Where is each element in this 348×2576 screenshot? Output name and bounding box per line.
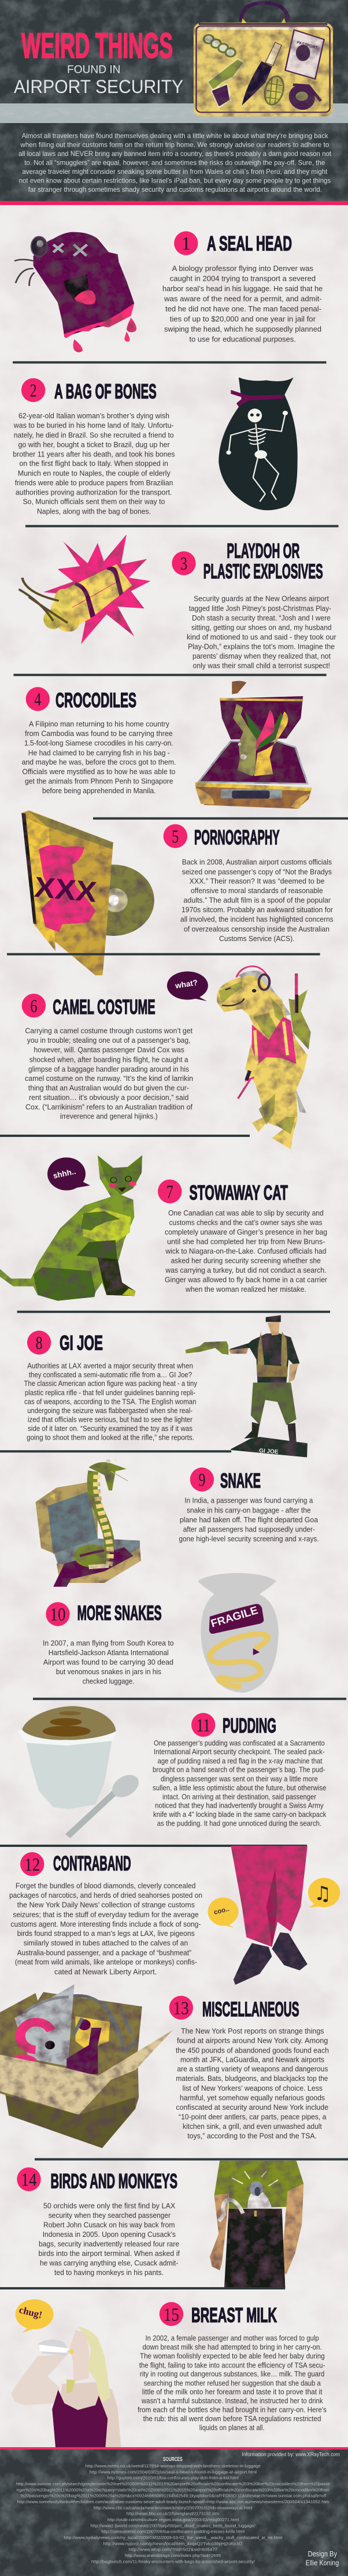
text block: cas of weapons, according to the TSA. The English woman bbox=[24, 1397, 196, 1406]
text block: Back in 2008, Australian airport customs officials bbox=[182, 858, 332, 867]
text block bbox=[24, 1361, 197, 1442]
text block: he was carrying anything else, Cusack admit- bbox=[40, 2259, 178, 2268]
text block: He had claimed to be carrying fish in his bag - bbox=[28, 748, 170, 757]
icon: cat bbox=[0, 1155, 142, 1301]
text block bbox=[13, 411, 175, 515]
text block: 62-year-old Italian woman’s brother’s dying wish bbox=[18, 411, 169, 420]
speech bubble: shhh bbox=[47, 1158, 90, 1190]
speech bubble: what: what? bbox=[174, 978, 198, 990]
text block: birds found strapped to a man’s legs at LAX, live pigeons bbox=[17, 1929, 195, 1938]
text block: bags, security inadvertently released four rare bbox=[39, 2240, 179, 2248]
text block: undergoing the seizure was flabbergasted when she real- bbox=[27, 1406, 192, 1415]
sources list: http://www.somebodythinkofthechildren.com/australian-customs-seize-adult-brady-bunch-spoof/+http://www.abc.net.au/news/newsitems/200504/s1341052.htm bbox=[17, 2499, 329, 2504]
heading: CAMEL COSTUME bbox=[53, 996, 156, 1018]
text block: Security guards at the New Orleans airport bbox=[194, 594, 329, 603]
number 4 bbox=[26, 687, 50, 711]
text block: rent situation… it’s obviously a poor decision,” said bbox=[29, 1093, 188, 1102]
text block: irreverence and general hijinks.) bbox=[60, 1112, 158, 1121]
text block: 1970s sitcom. Probably an awkward situation for bbox=[182, 905, 334, 914]
text block bbox=[22, 719, 176, 795]
text block: sitting, getting our shoes on and, my husband bbox=[191, 623, 332, 632]
text block: harmful, yet somehow equally nefarious goods bbox=[180, 2094, 325, 2102]
fragile label: FRAGILE bbox=[209, 1604, 260, 1630]
text block: similarly stowed in tubes attached to the calves of an bbox=[24, 1939, 188, 1947]
text block: searching the mother refused her suggestion that she daub a bbox=[144, 2378, 321, 2387]
sources list: http://www2.ljworld.com/news/2007/sep/09/jars_dead_snakes_birds_found_luggage/ bbox=[91, 2523, 256, 2528]
panel: 14 birds and monkeys bbox=[17, 2161, 303, 2289]
sources list: http://bagbunch.com/11-freaky-encounters-with-bags-by-astonished-airport-security/ bbox=[91, 2559, 256, 2564]
intro text: to. Not all “smugglers” are equal, however, and sometimes the risks do outweigh the pay-off. Sure, the bbox=[24, 159, 325, 167]
text block: Officials were mystified as to how he was able to bbox=[22, 767, 175, 776]
sources list: http://www.nytimes.com/2004/03/21/us/seal-s-head-s-found-in-luggage-at-airport.html bbox=[90, 2469, 257, 2474]
panel: 10 more snakes bbox=[43, 1573, 279, 1693]
sources list: http://news.bbc.co.uk/2/hi/england/2173150.stm bbox=[127, 2511, 219, 2516]
text block bbox=[153, 1739, 327, 1828]
text block: customs checks and the cat’s owner says she was bbox=[169, 1218, 323, 1227]
text block: from Cambodia was found to be carrying three bbox=[25, 729, 173, 738]
sources heading: SOURCES bbox=[163, 2456, 183, 2463]
number 1 bbox=[174, 231, 198, 255]
text block: was to be buried in his home land of Italy. Unfortu- bbox=[13, 421, 174, 430]
icon: fragile bag of snakes bbox=[198, 1573, 279, 1693]
text block: packages of narcotics, and herds of dried seahorses posted on bbox=[9, 1891, 202, 1900]
text block: Airport was found to be carrying 30 dead bbox=[43, 1657, 173, 1666]
icon: woman drinking milk bbox=[11, 2327, 121, 2447]
text block: toys,” according to the Post and the TSA. bbox=[187, 2132, 317, 2140]
intro text: all local laws and NEVER bring any banned item into a country, as there’s probably a darn good reason not bbox=[18, 150, 332, 158]
number 5: 5 bbox=[172, 826, 179, 847]
text block: seized one passenger’s copy of “Not the Bradys bbox=[182, 867, 332, 876]
sources list: http://guyism.com/2010/01/tsa-confiscates-play-doh-from-a-kid.html bbox=[107, 2475, 239, 2481]
sources list: http://www.anecdotage.com/index.php?aid=2695 bbox=[125, 2553, 221, 2558]
text block: Cox. (“Larrikinism” refers to an Australian tradition of bbox=[25, 1102, 192, 1111]
panel: 11 pudding bbox=[17, 1706, 327, 1836]
number 15 bbox=[160, 2302, 183, 2326]
panel: 5 pornography bbox=[21, 811, 334, 975]
text block: are a startling variety of weapons and dangerous bbox=[177, 2065, 328, 2073]
text block: checked luggage. bbox=[83, 1677, 134, 1685]
number 15: 15 bbox=[164, 2304, 179, 2325]
text block bbox=[25, 1026, 193, 1121]
text block: Robert John Cusack on his way back from bbox=[43, 2220, 175, 2229]
sources list bbox=[16, 2463, 330, 2564]
text block: brother 11 years after his death, and took his bones bbox=[13, 450, 175, 459]
number 7: 7 bbox=[166, 1181, 173, 1202]
text block bbox=[187, 594, 336, 670]
text block: caught in 2004 trying to transport a severed bbox=[170, 274, 316, 283]
text block: little of the milk onto her forearm and taste it to prove that it bbox=[142, 2388, 323, 2396]
text block: seizures; that is the stuff of everyday tedium for the average bbox=[13, 1910, 199, 1919]
number 7 bbox=[158, 1180, 182, 1203]
text block: ted he did not have one. The man faced penal- bbox=[165, 304, 321, 313]
text block bbox=[165, 1209, 328, 1293]
text block: Customs Service (ACS). bbox=[219, 934, 295, 943]
text block bbox=[180, 858, 334, 943]
heading bbox=[203, 540, 323, 583]
intro text bbox=[18, 132, 332, 194]
icon: dynamite explosion bbox=[19, 534, 150, 644]
text block: gone high-level security screening and x-rays. bbox=[179, 1534, 319, 1543]
heading: CONTRABAND bbox=[53, 1853, 131, 1875]
number 8 bbox=[27, 1330, 51, 1355]
number 6: 6 bbox=[30, 995, 37, 1016]
text block: A Filipino man returning to his home country bbox=[29, 719, 169, 728]
text block: age of pudding raised a red flag in the x-ray machine that bbox=[158, 1756, 323, 1765]
title: WEIRD THINGS bbox=[21, 26, 173, 65]
panel: 7 stowaway cat bbox=[0, 1155, 328, 1301]
heading: PUDDING bbox=[223, 1715, 276, 1737]
panel: 13 miscellaneous bbox=[0, 1984, 329, 2148]
speech bubble: music bbox=[308, 1878, 340, 1908]
icon: pudding cup and spoon bbox=[17, 1706, 144, 1836]
text block: the rub: this all went down before TSA regulations restricted bbox=[143, 2414, 321, 2423]
gi joe base label: GI JOE bbox=[259, 1448, 279, 1455]
text block: plastic replica rifle - that fell under guidelines banning repli- bbox=[25, 1388, 195, 1397]
heading: A SEAL HEAD bbox=[207, 232, 292, 255]
number 13: 13 bbox=[173, 1998, 189, 2019]
title: AIRPORT SECURITY bbox=[14, 76, 183, 97]
text block: asked her during security screening whether she bbox=[171, 1257, 321, 1265]
heading: STOWAWAY CAT bbox=[190, 1182, 288, 1205]
number 13 bbox=[169, 1996, 193, 2020]
text block: month at JFK, LaGuardia, and Newark airports bbox=[180, 2055, 324, 2064]
text block: side of it later on. “Security examined the toy as if it was bbox=[28, 1424, 192, 1433]
sources list: nger%20s%20bag%2011%2000%20a%20m?query=static%20net%202006%2011%2015%20airport%20officials%20confiscate%203%20live%20crocodiles%20from bbox=[17, 2487, 330, 2492]
number 14 bbox=[17, 2168, 41, 2191]
text block: only was their small child a terrorist suspect! bbox=[193, 661, 330, 670]
text block: Authorities at LAX averted a major security threat when bbox=[27, 1361, 193, 1370]
text block: but venomous snakes in jars in his bbox=[56, 1667, 161, 1676]
text block: Ginger was allowed to fly back home in a cat carrier bbox=[165, 1276, 328, 1284]
number 9 bbox=[190, 1467, 214, 1492]
icon: box of confiscated goods bbox=[0, 1984, 173, 2148]
text block: and maybe he was, before the crocs got to them. bbox=[22, 757, 176, 766]
text block: swiping the head, which he supposedly planned bbox=[164, 325, 321, 333]
panel: footer bbox=[0, 2447, 348, 2576]
speech bubble: chug bbox=[15, 2299, 53, 2333]
passport label: PASSPORT bbox=[296, 40, 319, 50]
panel: header bbox=[0, 0, 348, 205]
text block: all involved, the incident has highlighted concerns bbox=[180, 915, 334, 923]
sources list: http://www.sunstar.com.ph/search/google/static%20net%202006%2011%2015%20airport%20officials%20confiscate%203%20live%20crocodiles%20from%20passe bbox=[16, 2481, 330, 2486]
text block: ted to having monkeys in his pants. bbox=[54, 2268, 164, 2277]
text block: kitchen sink, a grill, and even unwashed adult bbox=[183, 2122, 322, 2131]
text block: In India, a passenger was found carrying a bbox=[184, 1496, 313, 1505]
text block: before being apprehended in Manila. bbox=[42, 786, 156, 795]
heading: BREAST MILK bbox=[191, 2304, 277, 2326]
designer credit: Design By bbox=[308, 2550, 338, 2558]
text block: you in trouble; stealing one out of a passenger’s bag, bbox=[27, 1036, 190, 1044]
text block: from each of the bottles she had brought in her carry-on. Here’s bbox=[138, 2406, 327, 2414]
intro text: Almost all travelers have found themselves dealing with a little white lie about what they’re bringing back bbox=[22, 132, 329, 140]
text block: after all passengers had supposedly under- bbox=[183, 1525, 315, 1534]
text block: wick to Niagara-on-the-Lake. Confused officials had bbox=[165, 1247, 326, 1255]
text block: A biology professor flying into Denver was bbox=[172, 264, 313, 273]
heading: GI JOE bbox=[60, 1332, 103, 1355]
text block: down breast milk she had attempted to bring in her carry-on. bbox=[142, 2343, 322, 2351]
number 11 bbox=[191, 1713, 215, 1737]
text block bbox=[138, 2334, 327, 2432]
icon: seal head bbox=[14, 232, 136, 352]
text block: go with her, bought a ticket to Brazil, dug up her bbox=[18, 440, 170, 449]
designer credit: Ellie Koning bbox=[306, 2559, 339, 2567]
text block: get the animals from Phnom Penh to Singapore bbox=[25, 777, 173, 786]
speech bubble: chug: chug! bbox=[18, 2304, 43, 2321]
text block bbox=[162, 264, 323, 344]
text block: International Airport security checkpoint. The sealed pack- bbox=[154, 1748, 325, 1756]
icon: suitcase with weapons bbox=[194, 3, 333, 117]
text block: Hartsfield-Jackson Atlanta International bbox=[49, 1648, 169, 1657]
speech bubble: what bbox=[167, 972, 208, 1001]
text block: when the woman realized her mistake. bbox=[185, 1285, 306, 1293]
text block: shocked when, after boarding his flight, he caught a bbox=[29, 1055, 188, 1064]
text block: friends were able to produce papers from Brazilian bbox=[15, 478, 173, 487]
text block: until she had completed her trip from New Bruns- bbox=[167, 1237, 325, 1246]
text block: kind of motioned to us and said - they took our bbox=[187, 633, 336, 641]
sources list: http://www.wtop.com/?nid=502&sid=605477 bbox=[129, 2547, 217, 2552]
sources list: http://www.nydailynews.com/ny_local/2009/03/02/2009-03-02_the_weird__wacky_stuff_confiscated_at_ne.html bbox=[64, 2535, 283, 2540]
text block: Doh stash a security threat. “Josh and I were bbox=[192, 614, 331, 622]
text block: the New York Daily News’ collection of strange customs bbox=[17, 1901, 195, 1909]
number 3 bbox=[172, 551, 196, 575]
number 2 bbox=[21, 378, 45, 402]
number 8: 8 bbox=[36, 1332, 43, 1353]
text block: liquids on planes at all. bbox=[199, 2423, 265, 2432]
text block: plane had taken off. The flight departed Goa bbox=[180, 1515, 319, 1524]
panel: 15 breast milk bbox=[11, 2299, 327, 2447]
number 2: 2 bbox=[30, 380, 37, 401]
text block: Indonesia in 2005. Upon opening Cusack’s bbox=[43, 2230, 176, 2239]
icon: suitcase with crocodiles bbox=[195, 681, 312, 809]
text block: they confiscated a semi-automatic rifle from a… GI Joe? bbox=[29, 1370, 192, 1379]
text block: snake in his carry-on baggage - after the bbox=[187, 1506, 311, 1514]
text block: glimpse of a baggage handler parading around in his bbox=[28, 1065, 189, 1073]
number 6 bbox=[22, 994, 46, 1017]
sources list: http://www.cbc.ca/canada/new-brunswick/story/2007/05/02/nb-stowawaycat.html bbox=[94, 2505, 253, 2510]
text block: dingless passenger was sent on their way a little more bbox=[161, 1774, 318, 1783]
text block bbox=[179, 1496, 319, 1543]
number 10 bbox=[46, 1602, 70, 1626]
text block: thing that an Australian would do but given the cur- bbox=[28, 1084, 189, 1092]
text block: Forget the bundles of blood diamonds, cleverly concealed bbox=[16, 1881, 196, 1890]
text block: tagged little Josh Pitney’s post-Christmas Play- bbox=[189, 604, 331, 612]
heading: MORE SNAKES bbox=[77, 1602, 162, 1625]
text block: completely unaware of Ginger’s presence in her bag bbox=[165, 1228, 327, 1236]
intro text: average traveler might consider sneaking some butter in from Wales or chili’s from Peru, and they might bbox=[22, 168, 328, 176]
text block: confiscated at security around New York include bbox=[176, 2103, 328, 2112]
heading: CROCODILES bbox=[55, 689, 136, 712]
speech bubble: music: ♫ bbox=[314, 1882, 331, 1905]
text block: Carrying a camel costume through customs won’t get bbox=[25, 1026, 192, 1035]
text block: the flight, failing to take into account the efficiency of TSA secu- bbox=[139, 2361, 325, 2369]
text block: Naples, along with the bag of bones. bbox=[37, 507, 151, 515]
text block: birds into the airport terminal. When asked if bbox=[38, 2249, 180, 2258]
text block: was aware of the need for a permit, and admit- bbox=[164, 295, 322, 303]
number 3: 3 bbox=[180, 553, 187, 574]
number 1: 1 bbox=[182, 233, 191, 254]
text block: In 2002, a female passenger and mother was forced to gulp bbox=[146, 2334, 319, 2343]
text block: materials. Bats, bludgeons, and blackjacks top the bbox=[176, 2074, 328, 2083]
icon: pink trousers and shoes bbox=[231, 1846, 308, 1985]
text block bbox=[38, 2201, 180, 2277]
text block: list of New Yorkers’ weapons of choice. Less bbox=[183, 2084, 323, 2092]
text block: going to shoot them and looked at the rifle,” she reports. bbox=[27, 1433, 194, 1442]
text block: brought on a hand search of the passenger’s bag. The pud- bbox=[153, 1765, 325, 1774]
text block: of overzealous censorship inside the Australian bbox=[184, 924, 330, 933]
sources list: http://osdir.com/ml/culture.region.india.goa/2003-03/msg00271.html bbox=[107, 2517, 239, 2522]
number 14: 14 bbox=[21, 2169, 37, 2190]
number 12: 12 bbox=[24, 1854, 40, 1875]
text block: intact. On arriving at their destination, said passenger bbox=[162, 1792, 317, 1801]
text block: was carrying a turkey, but did not conduct a search. bbox=[165, 1266, 326, 1274]
text block: The New York Post reports on strange things bbox=[181, 2027, 324, 2035]
panel: 12 contraband bbox=[9, 1846, 340, 1985]
text block: ized that officials were serious, but had to see the lighter bbox=[28, 1415, 193, 1424]
designer credit bbox=[306, 2550, 339, 2567]
text block: customs agent. More interesting finds include a flock of song- bbox=[10, 1920, 201, 1928]
sources list: http://consumerist.com/2007/08/tsa-confiscates-pudding-misses-knife.html bbox=[102, 2529, 245, 2534]
number 4: 4 bbox=[34, 689, 41, 709]
intro text: far stranger through sometimes shady security and customs regulations at airports around the world. bbox=[28, 185, 322, 194]
text block bbox=[43, 1638, 174, 1685]
number 9: 9 bbox=[198, 1469, 205, 1490]
title: FOUND IN bbox=[67, 64, 120, 76]
text block: 1.5-foot-long Siamese crocodiles in his carry-on. bbox=[24, 739, 173, 748]
text block: In 2007, a man flying from South Korea to bbox=[43, 1638, 174, 1647]
xxx label: XXX bbox=[33, 871, 98, 908]
text block: XXX.” Their reason? It was “deemed to be bbox=[190, 876, 324, 885]
text block: cated at Newark Liberty Airport. bbox=[54, 1967, 157, 1976]
text block: security when they searched passenger bbox=[49, 2211, 171, 2220]
heading: A BAG OF BONES bbox=[54, 380, 157, 403]
panel: 9 snake bbox=[35, 1458, 319, 1587]
icon: bag of bones bbox=[219, 377, 298, 510]
text block: Australia-bound passenger, and a package of “bushmeat” bbox=[17, 1948, 191, 1957]
icon: snake in suitcase bbox=[35, 1458, 141, 1587]
sources list: http://www.metro.co.uk/weird/117854-woman-stopped-with-brothers-skeleton-in-luggage bbox=[86, 2463, 261, 2469]
icon: man with monkey in pants bbox=[210, 2161, 303, 2289]
text block: wasn’t a harmful substance. Instead, he instructed her to drink bbox=[141, 2396, 323, 2405]
text block: One Canadian cat was able to slip by security and bbox=[168, 1209, 324, 1217]
speech bubble: shhh: shhh.. bbox=[53, 1167, 77, 1180]
panel: 4 crocodiles bbox=[22, 681, 312, 809]
text block: Play-Doh,” explains the tot’s mom. Imagine the bbox=[188, 642, 335, 650]
text block: camel costume on the runway. “It’s the kind of larrikin bbox=[25, 1074, 193, 1083]
text block bbox=[176, 2027, 329, 2140]
text block: found at airports around New York city. Among bbox=[177, 2036, 328, 2045]
grey band bbox=[0, 103, 348, 123]
number 5 bbox=[164, 824, 187, 848]
text block bbox=[9, 1881, 202, 1976]
speech bubble: coo: coo.. bbox=[213, 1906, 230, 1916]
icon: dvd case bbox=[21, 811, 154, 975]
panel: 8 gi joe bbox=[24, 1315, 308, 1458]
panel: 3 playdoh or plastic explosives bbox=[19, 534, 336, 670]
text block: One passenger’s pudding was confiscated at a Sacramento bbox=[154, 1739, 325, 1748]
text block: as the pudding. It had gone unnoticed during the search. bbox=[157, 1819, 321, 1828]
title bbox=[14, 26, 183, 97]
panel: 6 camel costume bbox=[22, 967, 311, 1149]
text block: The classic American action figure was packing heat - a tiny bbox=[24, 1379, 197, 1388]
text block: on the first flight back to Italy. When stopped in bbox=[19, 459, 168, 468]
text block: the 450 pounds of abandoned goods found each bbox=[176, 2046, 329, 2054]
sources list: http://www.nypost.com/p/news/local/item_4xqaQ2Tvlco38pHj2uKe3O bbox=[103, 2541, 242, 2546]
text block: to use for educational purposes. bbox=[190, 335, 296, 344]
text block: Munich en route to Naples, the couple of elderly bbox=[18, 469, 171, 477]
text block: harbor seal’s head in his luggage. He said that he bbox=[162, 284, 323, 293]
text block: parents’ dismay when they realized that, not bbox=[192, 652, 331, 660]
text block: 50 orchids were only the first find by LAX bbox=[43, 2201, 176, 2210]
text block: So, Munich officials sent them on their way to bbox=[23, 497, 165, 506]
intro text: not even know about certain restrictions, like Israel’s iPad ban, but every day some people try to get things bbox=[19, 177, 331, 185]
speech bubble: coo bbox=[208, 1897, 238, 1928]
text block: authorities proving authorization for the transport. bbox=[16, 488, 172, 497]
text block: however, will. Qantas passenger David Cox was bbox=[34, 1046, 184, 1054]
sources list: %20passenger%20s%20bag%2011%2000%20a%20m&cx=002466650891154542549:1kyajibber0&cof=FORID:11&sitesearch=www.sunstar.com.ph&safe=off bbox=[20, 2493, 327, 2499]
text block: “10-point deer antlers, car parts, peace pipes, a bbox=[179, 2113, 327, 2121]
text block: ties of up to $20,000 and one year in jail for bbox=[170, 315, 316, 324]
text block: nately, he died in Brazil. So she recruited a friend to bbox=[14, 430, 174, 439]
text block: (meat from wild animals, like antelope or monkeys) confis- bbox=[15, 1958, 197, 1967]
panel: 1 a seal head bbox=[14, 231, 323, 352]
panel: 2 a bag of bones bbox=[13, 377, 298, 515]
text block: knife with a 4” locking blade in the same carry-on backpack bbox=[153, 1810, 327, 1819]
number 12 bbox=[20, 1852, 44, 1876]
text block: offensive to moral standards of reasonable bbox=[191, 886, 323, 895]
intro text: when filling out their customs form on the return trip home. We strongly advise our readers to adhere to bbox=[20, 141, 330, 149]
text block: noticed that they had inadvertently brought a Swiss Army bbox=[155, 1801, 324, 1809]
heading: SNAKE bbox=[220, 1470, 261, 1492]
text block: sullen, a little less optimistic about the future, but otherwise bbox=[153, 1783, 326, 1792]
number 10: 10 bbox=[50, 1604, 66, 1625]
text block: rity in rooting out dangerous substances, like… milk. The guard bbox=[140, 2370, 324, 2378]
heading: BIRDS AND MONKEYS bbox=[51, 2170, 177, 2192]
icon: camel costume bbox=[217, 967, 311, 1149]
icon: gi joe figure bbox=[186, 1315, 308, 1458]
text block: The woman foolishly expected to be able feed her baby during bbox=[140, 2352, 325, 2361]
number 11: 11 bbox=[197, 1715, 210, 1735]
text block: adults.” The adult film is a spoof of the popular bbox=[184, 896, 331, 905]
